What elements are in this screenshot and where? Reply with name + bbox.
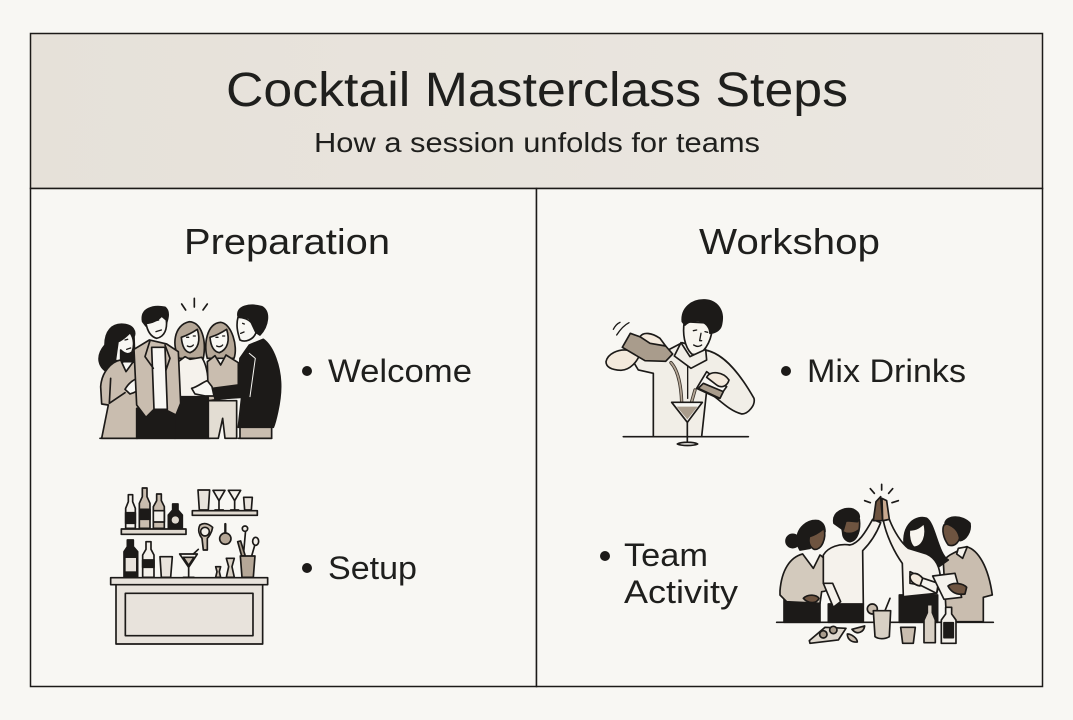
martini: [672, 402, 702, 422]
bullet: setup: [302, 563, 312, 573]
collar: [674, 343, 707, 368]
woman left: [99, 324, 135, 373]
face: [684, 322, 713, 354]
title: Cocktail Masterclass Steps: [226, 64, 848, 117]
label: welcome: Welcome: [328, 353, 472, 389]
woman 3: [899, 595, 938, 622]
man right: [943, 547, 992, 622]
shirt: [628, 343, 754, 437]
man 2: [142, 307, 168, 326]
icon: bartender mixing: [606, 300, 754, 445]
icon: team high five: [777, 484, 993, 643]
label: mix drinks: Mix Drinks: [807, 353, 966, 389]
icon: group welcome: [99, 298, 281, 438]
man 2: [828, 604, 863, 622]
glass: [697, 372, 727, 398]
label: team activity: Team: [624, 537, 708, 573]
subtitle: How a session unfolds for teams: [314, 127, 760, 158]
heading: preparation: Preparation: [184, 221, 390, 262]
label: setup: Setup: [328, 550, 417, 586]
woman 3: [175, 322, 204, 358]
left arm: [606, 350, 640, 370]
woman 4: [206, 322, 235, 358]
panel: preparation: [30, 188, 536, 686]
pour: [671, 363, 695, 402]
panel: workshop: [536, 188, 1042, 686]
shaker: [622, 333, 673, 361]
bullet: mix drinks: [781, 366, 791, 376]
icon: bar setup: [111, 488, 268, 644]
label: team activity: [624, 537, 738, 610]
bullet: welcome: [302, 366, 312, 376]
label: team activity: Activity: [624, 574, 738, 610]
hair: [682, 300, 722, 333]
header band: [30, 34, 1042, 188]
man 5: [238, 305, 267, 335]
woman left: [784, 598, 820, 622]
drinks: [809, 627, 846, 643]
bullet: team activity: [600, 551, 610, 561]
heading: workshop: Workshop: [699, 221, 880, 262]
faces: [125, 320, 244, 340]
